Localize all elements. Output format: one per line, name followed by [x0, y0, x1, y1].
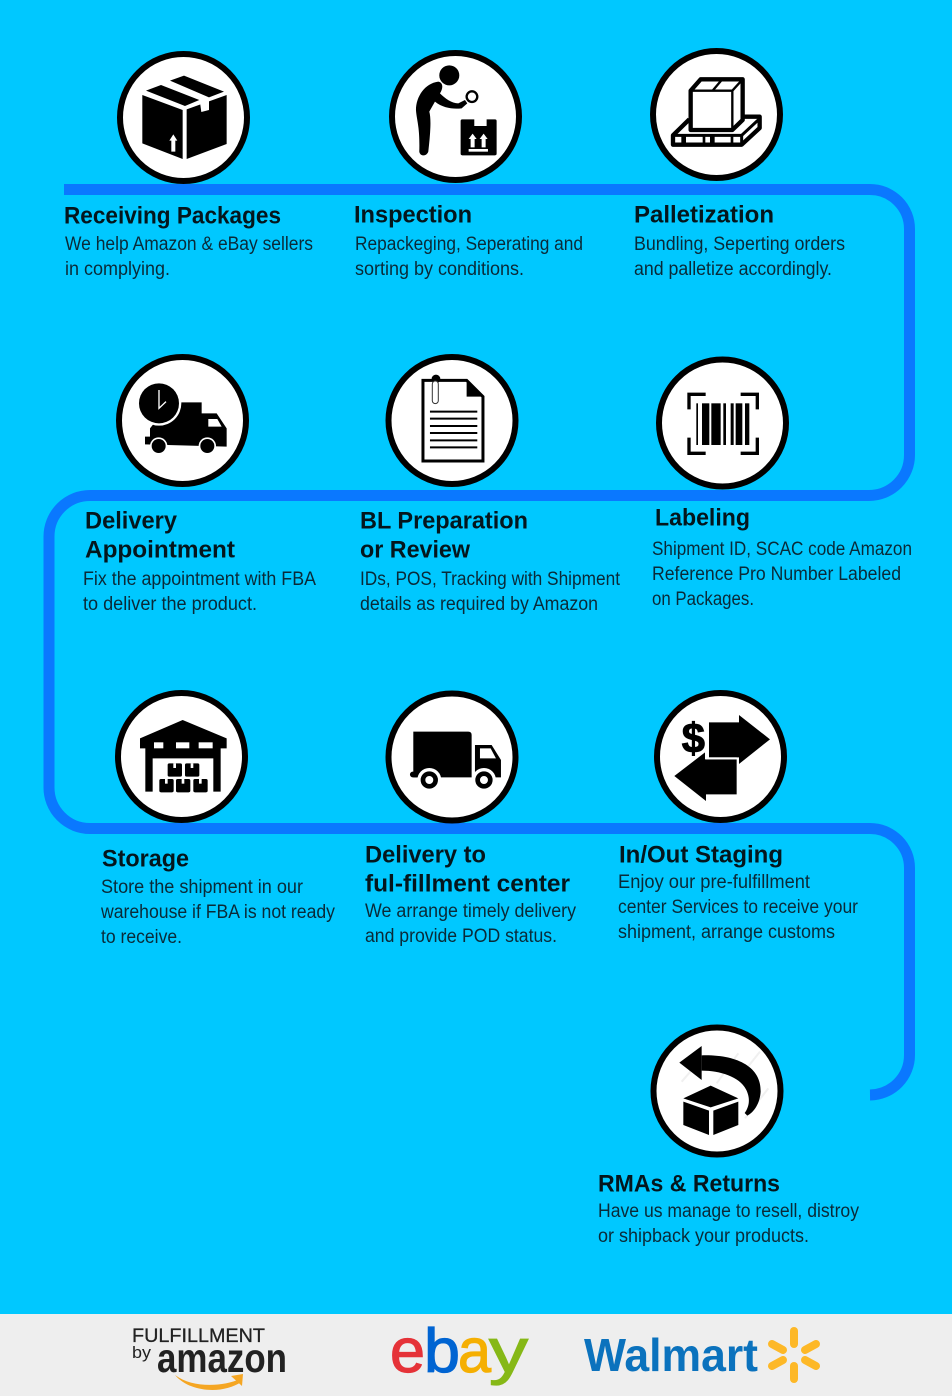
icon: box with return arrow: [654, 1028, 780, 1154]
description: [83, 569, 316, 615]
description: or shipback your products.: [598, 1226, 809, 1247]
heading: or Review: [360, 536, 470, 564]
logo: fulfillment by amazon: by: [132, 1343, 152, 1362]
heading: Delivery: [85, 508, 178, 534]
description: center Services to receive your: [618, 897, 859, 918]
description: IDs, POS, Tracking with Shipment: [360, 569, 621, 590]
icon: person inspecting box: [392, 53, 519, 180]
heading: Storage: [102, 846, 189, 872]
process flow line: [49, 190, 910, 1095]
description: [618, 872, 859, 943]
logo: fulfillment by amazon: FULFILLMENT: [132, 1325, 265, 1347]
description: details as required by Amazon: [360, 594, 598, 615]
icon: parcel box: [120, 54, 247, 181]
description: [365, 901, 576, 947]
icon: truck with clock: [119, 357, 246, 484]
description: [100, 877, 335, 948]
description: Reference Pro Number Labeled: [652, 564, 901, 585]
description: and palletize accordingly.: [634, 259, 832, 280]
icon: dollar with two arrows: $: [682, 714, 705, 761]
logo: ebay: y: [489, 1317, 528, 1386]
icon: document with paperclip: [388, 357, 516, 484]
heading: [365, 842, 570, 898]
description: and provide POD status.: [365, 926, 557, 947]
heading: Receiving Packages: [64, 202, 281, 230]
description: on Packages.: [652, 589, 754, 610]
step 5: BL preparation: [360, 357, 621, 615]
logo: fulfillment by amazon: [132, 1325, 287, 1390]
description: Shipment ID, SCAC code Amazon: [652, 539, 912, 560]
description: Fix the appointment with FBA: [83, 569, 316, 590]
icon: box on pallet: [653, 51, 780, 178]
description: We help Amazon & eBay sellers: [65, 234, 313, 255]
logo: walmart: Walmart: [584, 1329, 758, 1381]
description: in complying.: [65, 259, 170, 280]
description: Store the shipment in our: [101, 877, 304, 898]
step 4: delivery appointment: [83, 357, 316, 615]
heading: Inspection: [354, 202, 472, 228]
icon: delivery truck: [388, 694, 516, 820]
heading: [85, 508, 235, 564]
icon: dollar with two arrows: [657, 693, 784, 820]
description: Have us manage to resell, distroy: [598, 1201, 859, 1222]
description: [65, 234, 313, 280]
heading: Palletization: [634, 202, 774, 228]
icon: barcode scan: [659, 360, 786, 486]
description: [598, 1201, 859, 1247]
description: Enjoy our pre-fulfillment: [618, 872, 811, 893]
description: sorting by conditions.: [355, 259, 524, 280]
logo: ebay: e: [390, 1317, 425, 1386]
logo: fulfillment by amazon: amazon: [157, 1335, 287, 1381]
heading: ful-fillment center: [365, 870, 570, 898]
logo: ebay: a: [458, 1317, 491, 1386]
description: to receive.: [101, 927, 182, 948]
icon: warehouse: [118, 693, 245, 820]
heading: In/Out Staging: [619, 842, 783, 868]
description: [652, 539, 912, 610]
logo: ebay: b: [424, 1317, 460, 1386]
heading: BL Preparation: [360, 508, 528, 534]
description: warehouse if FBA is not ready: [100, 902, 335, 923]
step 6: labeling: [652, 360, 912, 610]
heading: Delivery to: [365, 842, 486, 868]
heading: RMAs & Returns: [598, 1170, 780, 1198]
step 2: inspection: [354, 53, 583, 280]
step 10: RMAs and returns: [598, 1028, 859, 1247]
heading: [360, 508, 528, 564]
step 9: in/out staging: [618, 693, 859, 943]
description: to deliver the product.: [83, 594, 257, 615]
description: Bundling, Seperting orders: [634, 234, 845, 255]
heading: Appointment: [85, 536, 235, 564]
step 1: receiving packages: [64, 54, 313, 280]
description: Repackeging, Seperating and: [355, 234, 583, 255]
description: [634, 234, 845, 280]
footer logo bar: [0, 1314, 952, 1396]
step 8: delivery to fulfillment center: [365, 694, 576, 947]
step 3: palletization: [634, 51, 845, 280]
logo: ebay: [390, 1317, 528, 1386]
description: [360, 569, 621, 615]
description: [355, 234, 583, 280]
heading: Labeling: [655, 504, 750, 532]
description: We arrange timely delivery: [365, 901, 576, 922]
description: shipment, arrange customs: [618, 922, 835, 943]
step 7: storage: [100, 693, 335, 948]
